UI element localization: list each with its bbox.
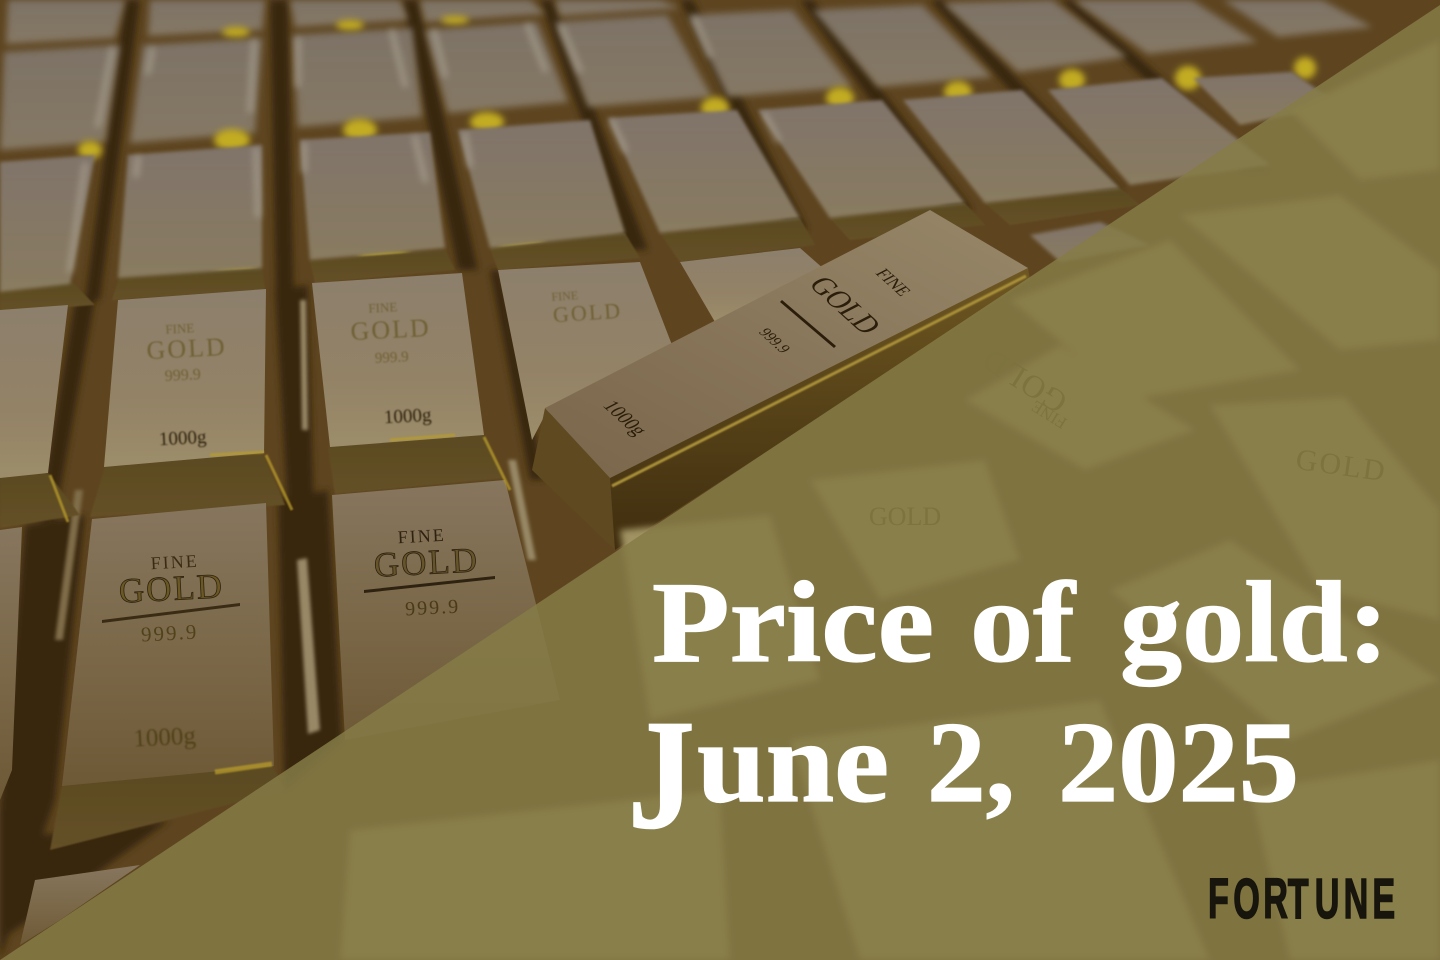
title line 1	[652, 559, 1389, 687]
bar stamps: second row: 999.9	[164, 366, 201, 385]
bar stamps: near center bar: GOLD	[373, 540, 480, 585]
title line 1: of	[970, 559, 1076, 687]
bar stamps: near left bar: 999.9	[140, 620, 199, 646]
bar stamps: second row: GOLD	[146, 332, 227, 365]
bar stamps: near left bar	[102, 551, 240, 753]
far bars row	[0, 0, 1372, 150]
bar stamps: second row	[146, 288, 623, 450]
lifted bar front face	[610, 268, 1030, 550]
lifted bar top face	[545, 210, 1028, 478]
lifted bar stamps: 999.9	[754, 326, 794, 356]
lifted bar stamps: 1000g	[597, 397, 652, 439]
lifted bar stamps: GOLD	[801, 272, 888, 339]
title line 2	[628, 688, 1299, 861]
near bars row	[0, 248, 825, 478]
bar stamps: second row: 1000g	[383, 405, 432, 428]
under-overlay stamps	[869, 341, 1389, 531]
bars under the olive overlay	[340, 40, 1440, 960]
bar stamps: second row: GOLD	[350, 313, 431, 346]
front row bars	[0, 480, 560, 945]
title line 2: 2,	[927, 699, 1015, 827]
bar stamps: near left bar: GOLD	[118, 566, 225, 611]
bar stamps: near left bar: 1000g	[133, 722, 197, 753]
gold glints between bars	[78, 16, 1316, 273]
lifted gold bar	[532, 210, 1030, 550]
lifted bar stamps	[597, 266, 915, 439]
under-overlay stamps: FINE	[1028, 397, 1070, 433]
middle bars row	[0, 72, 1340, 292]
row front faces	[0, 188, 1140, 850]
lifted bar left end	[532, 408, 615, 550]
bar stamps: second row: 1000g	[158, 427, 207, 450]
bar stamps: near left bar: FINE	[150, 551, 199, 573]
under-overlay stamps: GOLD	[1294, 443, 1389, 488]
title line 1: gold:	[1120, 559, 1389, 687]
title line 2: J	[628, 688, 695, 861]
bar stamps: near center bar	[364, 525, 495, 620]
logo: Fortune wordmark: FORTUNE	[1208, 866, 1395, 930]
bar stamps: near center bar: FINE	[397, 525, 446, 547]
lifted bar gold edge	[612, 276, 1026, 486]
bar stamps: second row: GOLD	[552, 298, 623, 327]
gold edge glints on bars	[50, 435, 510, 772]
title line 2: 2025	[1058, 699, 1299, 827]
title	[628, 559, 1389, 861]
pale edge highlights on far bars	[70, 20, 778, 270]
bar stamps: second row: 999.9	[375, 349, 409, 367]
lifted bar stamps: FINE	[871, 266, 915, 299]
title line 1: Price	[652, 559, 934, 687]
under-overlay stamps: GOLD	[869, 502, 941, 531]
bar stamps: second row: FINE	[165, 320, 195, 337]
under-overlay stamps: GOLD	[975, 341, 1073, 421]
bar stamps: second row: FINE	[551, 288, 579, 304]
rod reflections in the gaps	[55, 300, 536, 734]
bar stamps: second row: FINE	[368, 299, 398, 316]
title line 2: une	[697, 699, 889, 827]
bar stamps: near center bar: 999.9	[405, 596, 461, 620]
